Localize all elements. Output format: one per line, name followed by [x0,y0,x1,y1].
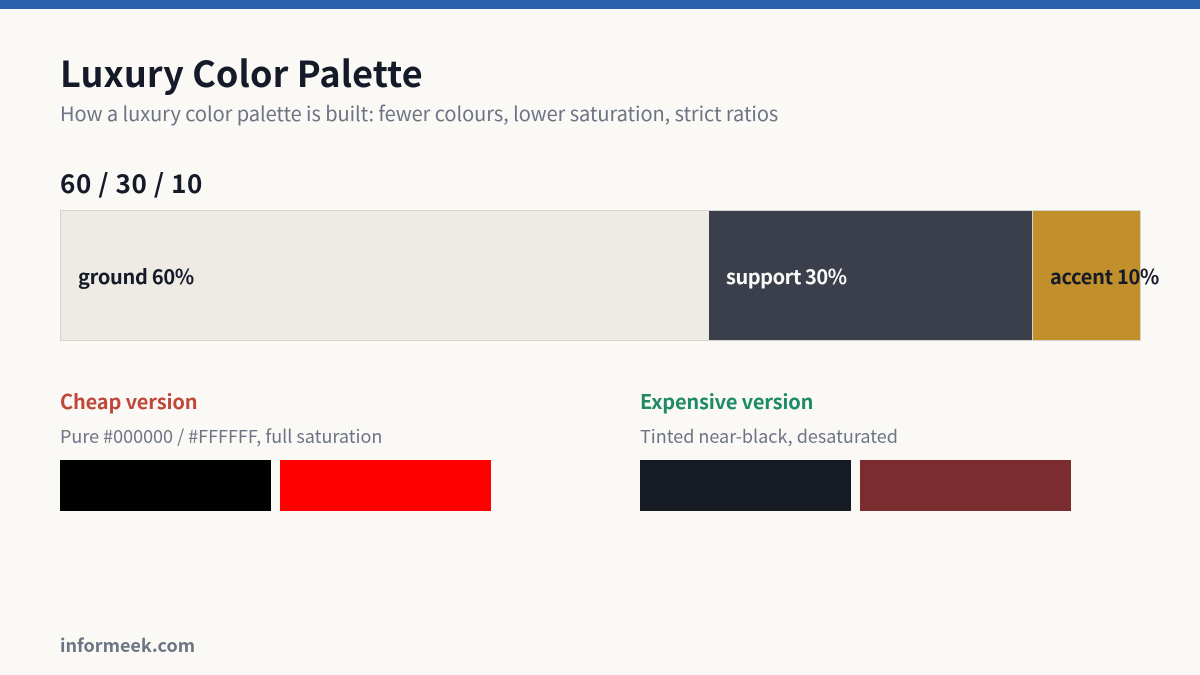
label: support 30%: support 30% [726,261,847,290]
heading: cheap version: Cheap version [60,386,197,415]
footer brand: informeek.com [60,632,195,658]
ratio heading: 60 / 30 / 10 [60,164,203,201]
label: ground 60%: ground 60% [78,261,194,290]
swatch: black [60,460,271,511]
swatch: red [280,460,491,511]
segment: accent 10% [1032,210,1141,341]
segment: support 30% [709,210,1032,341]
top accent bar [0,0,1200,9]
swatch: near-black [640,460,851,511]
title: Luxury Color Palette [60,46,423,98]
panel: expensive version [640,386,1071,511]
heading: expensive version: Expensive version [640,386,813,415]
swatch: desaturated red [860,460,1071,511]
panel: cheap version [60,386,491,511]
label: accent 10%: accent 10% [1050,261,1159,290]
description: expensive: Tinted near-black, desaturated [640,423,898,449]
description: cheap: Pure #000000 / #FFFFFF, full saturation [60,423,382,449]
ratio bar [60,210,1159,341]
segment: ground 60% [60,210,709,341]
subtitle: How a luxury color palette is built: fewer colours, lower saturation, strict ratios [60,98,778,127]
